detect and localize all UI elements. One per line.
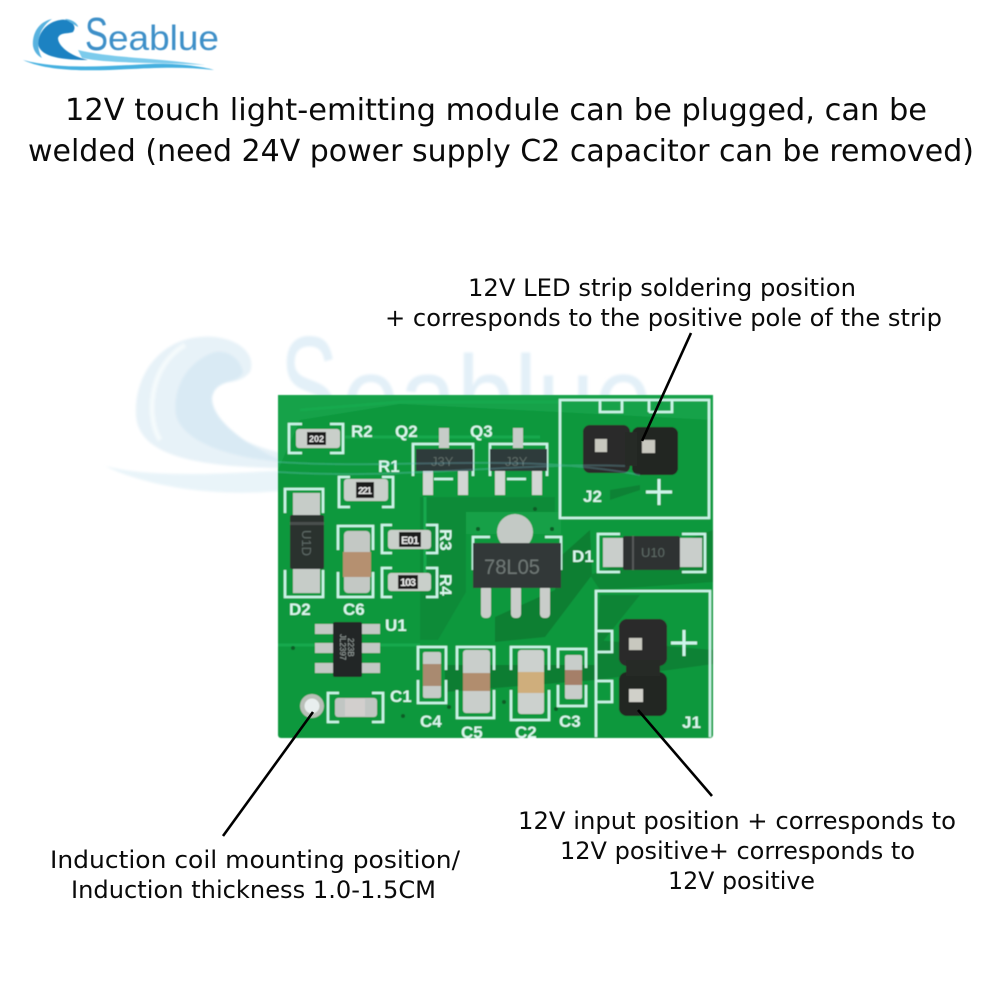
IC U1: JL2397 — [338, 634, 347, 661]
connector J1 — [619, 619, 667, 716]
resistor R2: 202 — [309, 434, 324, 444]
watermark: Seablue logo: eablue — [342, 332, 652, 464]
resistor R1 — [344, 479, 388, 501]
annotation: J1 input: 12V positive — [668, 867, 815, 895]
capacitor C4 — [423, 652, 441, 698]
capacitor C2 — [518, 650, 544, 714]
silkscreen labels: R2 — [351, 422, 373, 441]
silkscreen labels: D2 — [289, 600, 311, 619]
annotation: induction coil: Induction thickness 1.0-1.5CM — [71, 876, 436, 904]
arrow: J2 leader line — [642, 333, 691, 441]
diode D1: U10 — [641, 545, 665, 560]
annotation: J1 input: 12V input position + corresponds to — [518, 807, 956, 835]
transistor Q2: J3Y — [431, 454, 454, 469]
silkscreen labels: J2 — [583, 487, 602, 506]
annotation: J2 solder position: 12V LED strip soldering position — [468, 274, 856, 302]
silkscreen labels: C1 — [390, 687, 412, 706]
silkscreen labels: C3 — [559, 712, 581, 731]
title — [28, 93, 974, 169]
regulator 78L05: 78L05 — [484, 556, 540, 579]
annotation: J1 input — [518, 807, 956, 895]
silkscreen outlines — [285, 400, 710, 737]
pcb base — [278, 395, 713, 738]
silkscreen labels: R3 — [436, 529, 455, 551]
silkscreen labels: R4 — [436, 574, 455, 596]
capacitor C5 — [463, 650, 490, 713]
resistor R1: 221 — [358, 486, 372, 497]
arrow: J1 leader line — [638, 710, 712, 796]
traces — [278, 402, 560, 645]
annotation: induction coil — [50, 846, 461, 904]
annotation: J1 input: 12V positive+ corresponds to — [560, 837, 915, 865]
transistor Q3: J3Y — [505, 454, 528, 469]
title: 12V touch light-emitting module can be plugged, can be — [65, 93, 927, 128]
silkscreen labels: U1 — [385, 616, 407, 635]
coil mounting pad — [300, 694, 324, 718]
silkscreen labels: J1 — [682, 713, 701, 732]
annotation: J2 solder position — [385, 274, 942, 332]
diode D1 — [603, 536, 702, 570]
silkscreen labels — [289, 422, 701, 742]
annotation: induction coil: Induction coil mounting position/ — [50, 846, 461, 874]
IC U1: 223B — [346, 638, 355, 657]
resistor R3 — [388, 530, 431, 549]
resistor R2 — [296, 429, 340, 448]
annotation: J2 solder position: + corresponds to the positive pole of the strip — [385, 304, 942, 332]
silkscreen labels: D1 — [572, 547, 594, 566]
logo: Seablue: eablue — [108, 19, 219, 58]
silkscreen labels: C6 — [343, 600, 365, 619]
diode D2 — [290, 493, 324, 593]
title: welded (need 24V power supply C2 capacitor can be removed) — [28, 134, 974, 169]
resistor R4 — [388, 573, 431, 591]
diode D2: U1D — [299, 530, 314, 556]
capacitor C1 — [335, 698, 377, 717]
capacitor C3 — [565, 655, 582, 699]
watermark streaks over board — [278, 462, 640, 475]
copper pour shading — [278, 395, 713, 692]
logo: Seablue — [23, 8, 219, 70]
watermark: Seablue logo: S — [280, 306, 338, 469]
regulator 78L05 — [473, 514, 561, 618]
resistor R3: E01 — [401, 535, 419, 547]
silkscreen labels: C2 — [515, 723, 537, 742]
silkscreen labels: C5 — [461, 723, 483, 742]
watermark: Seablue logo — [105, 306, 652, 493]
silkscreen labels: Q2 — [395, 422, 418, 441]
IC U1 — [315, 622, 380, 677]
silkscreen labels: R1 — [378, 457, 400, 476]
silkscreen labels: C4 — [420, 712, 442, 731]
resistor R4: 103 — [400, 577, 416, 589]
transistor Q3 — [490, 428, 547, 495]
transistor Q2 — [416, 428, 473, 495]
capacitor C6 — [343, 531, 371, 593]
circuit board — [278, 395, 713, 742]
logo: Seablue: S — [85, 8, 108, 60]
arrow: coil leader line — [223, 712, 313, 836]
vias — [291, 507, 558, 718]
connector J2 — [583, 425, 678, 475]
silkscreen labels: Q3 — [470, 422, 493, 441]
